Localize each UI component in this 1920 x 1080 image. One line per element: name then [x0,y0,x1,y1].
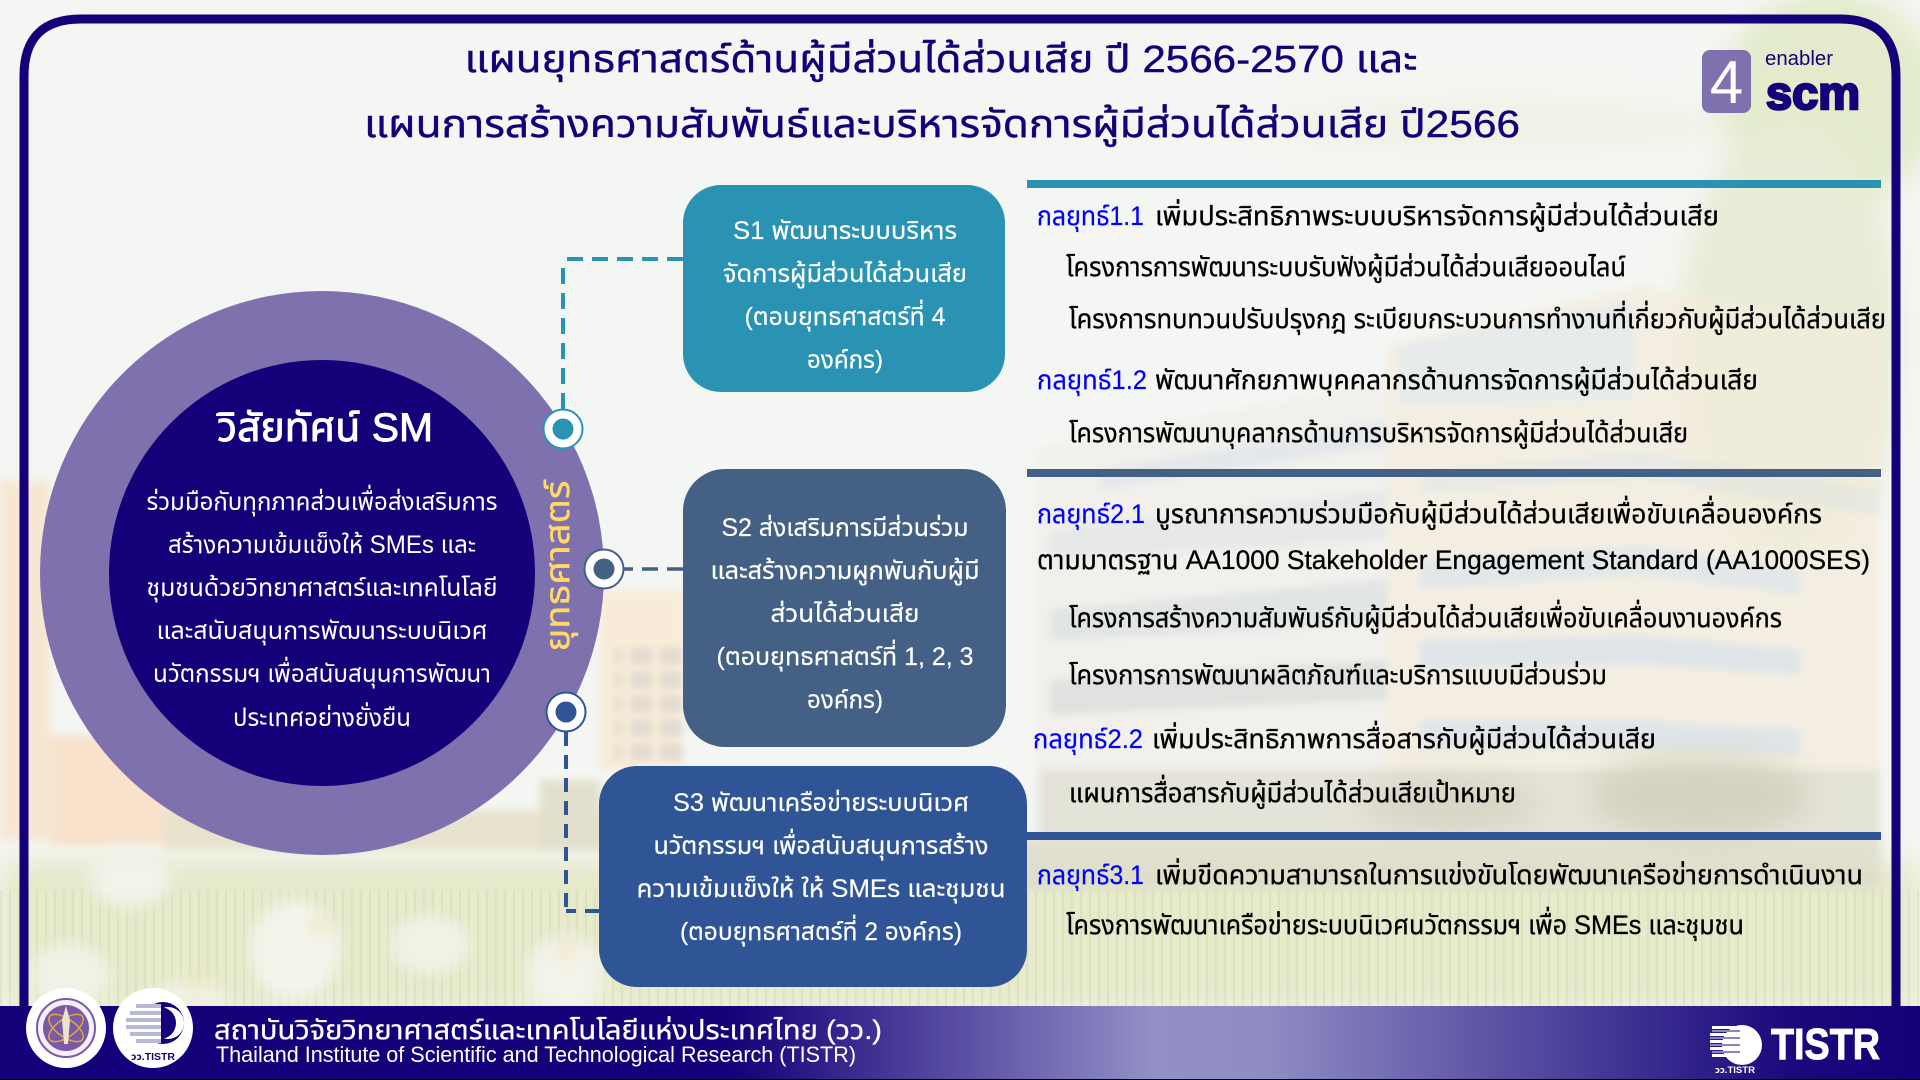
logo: TISTR wordmark: TISTR [1771,1020,1880,1069]
panel S2: (ตอบยุทธศาสตร์ที่ 1, 2, 3 [716,639,974,672]
title [364,39,1520,147]
strategies S3: โครงการพัฒนาเครือข่ายระบบนิเวศนวัตกรรมฯ เพื่อ SMEs และชุมชน [1066,906,1744,941]
panel S1: องค์กร) [807,346,883,374]
panel S3: S3 พัฒนาเครือข่ายระบบนิเวศ [673,789,969,817]
footer band [0,1006,1920,1080]
vision text: ชุมชนด้วยวิทยาศาสตร์และเทคโนโลยี [146,574,498,603]
bar S3 [1027,832,1881,840]
logo: TISTR wordmark [1710,1020,1880,1075]
strategies S2: กลยุทธ์2.1 [1037,499,1145,530]
vision text: และสนับสนุนการพัฒนาระบบนิเวศ [156,617,488,646]
panel S1 [683,185,1005,392]
panel S2 [683,469,1006,747]
field [0,890,1920,1006]
bar S2 [1027,469,1881,477]
connector S2 [624,567,683,571]
strategies S2: เพิ่มประสิทธิภาพการสื่อสารกับผู้มีส่วนได้ส่วนเสีย [1152,720,1656,755]
strategies S1: กลยุทธ์1.2 [1037,365,1147,396]
vision text: ร่วมมือกับทุกภาคส่วนเพื่อส่งเสริมการ [146,484,498,517]
connector S1 [563,259,683,409]
vision text: นวัตกรรมฯ เพื่อสนับสนุนการพัฒนา [153,656,491,689]
panel S3: ความเข้มแข็งให้ ให้ SMEs และชุมชน [636,875,1006,904]
strategies S2: แผนการสื่อสารกับผู้มีส่วนได้ส่วนเสียเป้าหมาย [1069,774,1516,809]
vision circle [40,291,604,855]
panel S3: นวัตกรรมฯ เพื่อสนับสนุนการสร้าง [654,828,988,861]
panel S2: ส่วนได้ส่วนเสีย [770,600,920,628]
title: แผนยุทธศาสตร์ด้านผู้มีส่วนได้ส่วนเสีย ปี 2566-2570 และ [464,39,1418,82]
strategies S1 [1037,199,1886,449]
bar S1 [1027,180,1881,188]
panel S3 [599,766,1027,987]
logo: TISTR mark in white circle [113,988,193,1068]
strategies S1: พัฒนาศักยภาพบุคคลากรด้านการจัดการผู้มีส่วนได้ส่วนเสีย [1155,365,1758,396]
panel S1: (ตอบยุทธศาสตร์ที่ 4 [744,299,946,332]
strategies S1: โครงการพัฒนาบุคลากรด้านการบริหารจัดการผู้มีส่วนได้ส่วนเสีย [1069,418,1688,449]
node S3 [546,692,586,732]
strategies S1: กลยุทธ์1.1 [1037,201,1144,232]
badge: 4 enabler SCM: 4 [1710,49,1743,116]
left building [0,480,683,850]
strategies S1: โครงการการพัฒนาระบบรับฟังผู้มีส่วนได้ส่วนเสียออนไลน์ [1066,252,1626,283]
trees in front of building [1360,755,1810,835]
strategies S2: โครงการการพัฒนาผลิตภัณฑ์และบริการแบบมีส่วนร่วม [1069,660,1607,690]
panel S2: องค์กร) [807,686,883,714]
connector S3 [566,732,599,911]
right building [1000,285,1880,888]
vision text [146,484,498,732]
strategies S1: เพิ่มประสิทธิภาพระบบบริหารจัดการผู้มีส่วนได้ส่วนเสีย [1155,199,1719,232]
logo: TISTR mark in white circle: วว.TISTR [131,1052,176,1063]
vision heading: วิสัยทัศน์ SM [216,406,433,450]
strategies S2: กลยุทธ์2.2 [1033,724,1143,755]
badge: 4 enabler SCM: enabler [1765,48,1833,70]
panel S2: และสร้างความผูกพันกับผู้มี [710,557,980,586]
panel S1: S1 พัฒนาระบบบริหาร [733,217,957,245]
logo: MOST seal [26,988,106,1068]
strategies S2: ตามมาตรฐาน AA1000 Stakeholder Engagement Standard (AA1000SES) [1037,545,1870,575]
strategies S1: โครงการทบทวนปรับปรุงกฎ ระเบียบกระบวนการทำงานที่เกี่ยวกับผู้มีส่วนได้ส่วนเสีย [1069,300,1886,335]
vision text: สร้างความเข้มแข็งให้ SMEs และ [168,531,476,559]
badge: 4 enabler SCM [1702,48,1860,119]
strategies S2: โครงการสร้างความสัมพันธ์กับผู้มีส่วนได้ส่วนเสียเพื่อขับเคลื่อนงานองค์กร [1069,599,1782,634]
strategies S2: บูรณาการความร่วมมือกับผู้มีส่วนได้ส่วนเสียเพื่อขับเคลื่อนองค์กร [1155,495,1822,530]
panel S2: S2 ส่งเสริมการมีส่วนร่วม [722,514,968,542]
strategies S3: เพิ่มขีดความสามารถในการแข่งขันโดยพัฒนาเครือข่ายการดำเนินงาน [1155,858,1863,890]
logo: TISTR wordmark: วว.TISTR [1715,1065,1756,1075]
vision text: ประเทศอย่างยั่งยืน [233,701,411,732]
panel S1: จัดการผู้มีส่วนได้ส่วนเสีย [723,260,967,289]
footer text: สถาบันวิจัยวิทยาศาสตร์และเทคโนโลยีแห่งประเทศไทย (วว.) [214,1015,882,1045]
badge: 4 enabler SCM: scm [1766,67,1860,119]
strategies S3 [1037,858,1863,941]
node S1 [544,410,582,448]
node S2 [584,550,624,588]
panel S3: (ตอบยุทธศาสตร์ที่ 2 องค์กร) [680,914,962,947]
strategies S2 [1033,495,1870,809]
strategies S3: กลยุทธ์3.1 [1037,860,1144,891]
rotated label: strategy: ยุทธศาสตร์ [539,479,578,652]
footer text: Thailand Institute of Scientific and Technological Research (TISTR) [216,1042,856,1067]
title: แผนการสร้างความสัมพันธ์และบริหารจัดการผู้มีส่วนได้ส่วนเสีย ปี2566 [364,104,1520,147]
footer text [214,1015,882,1067]
